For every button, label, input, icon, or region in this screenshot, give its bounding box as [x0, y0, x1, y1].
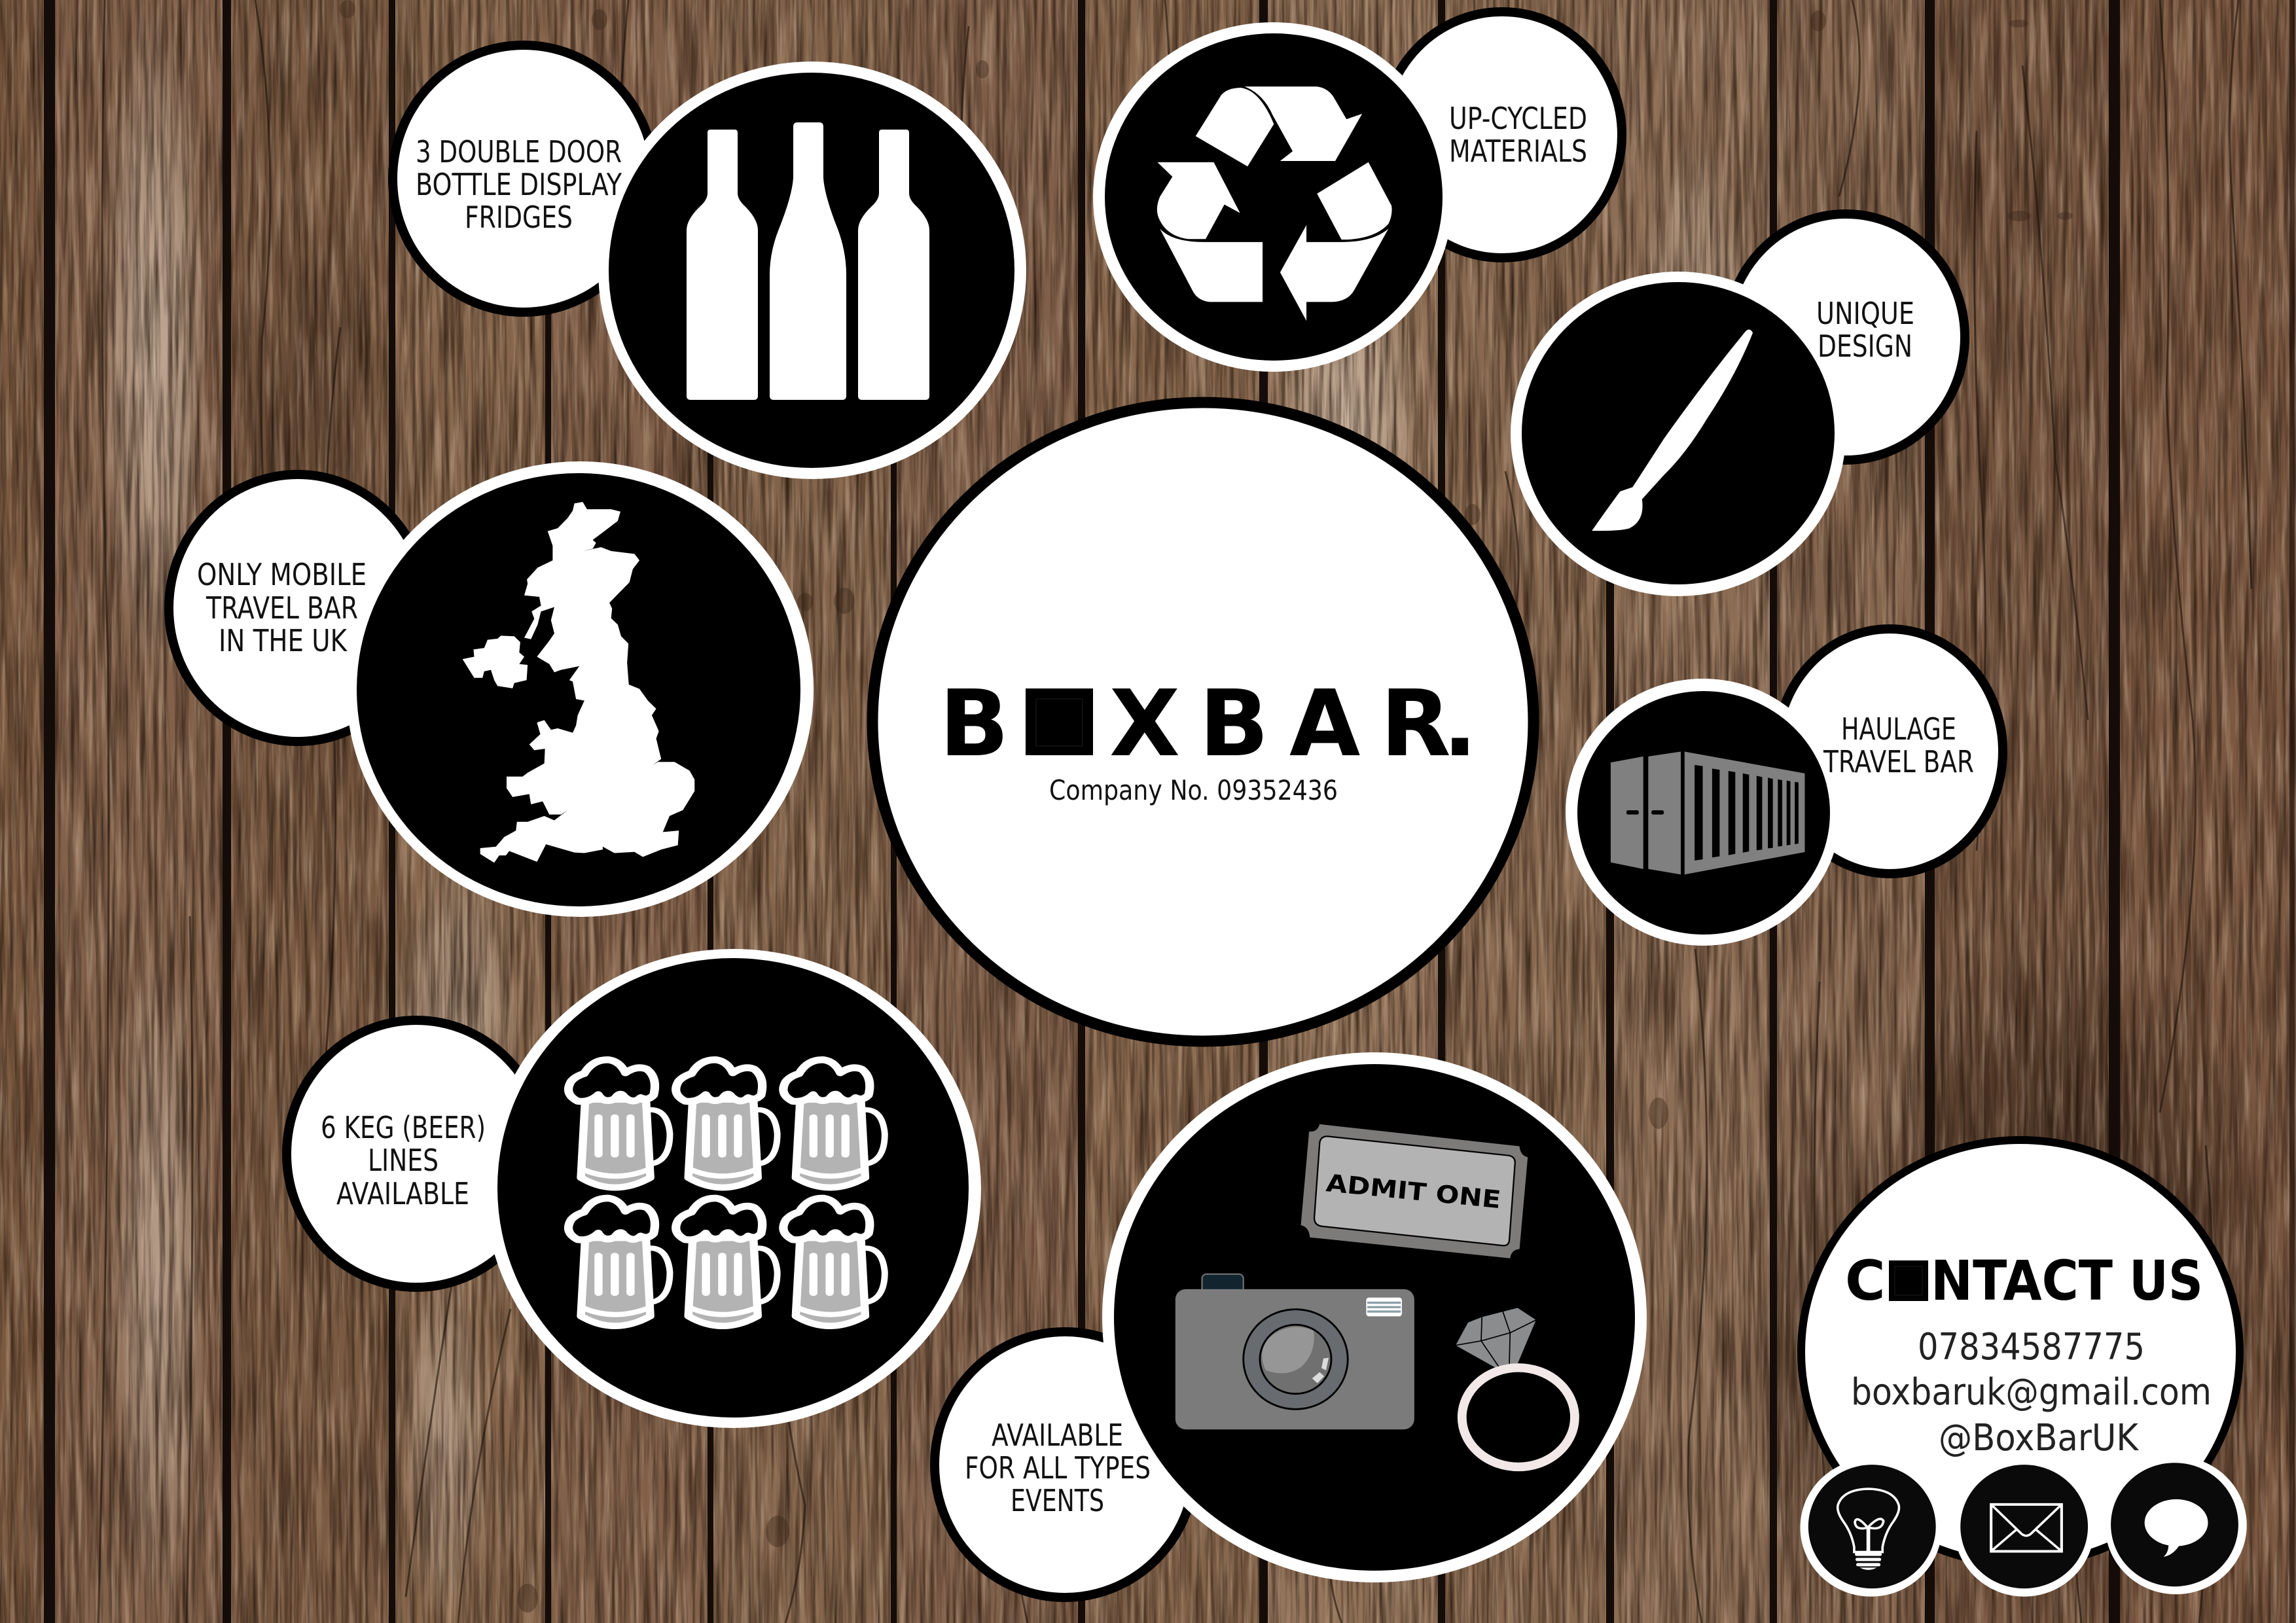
logo: BOXBAR wordmark: B — [1199, 671, 1269, 777]
heading: contact us: US — [2129, 1249, 2203, 1313]
label text: design — [1816, 296, 1914, 364]
panel: contact — [1800, 1140, 2247, 1597]
heading: contact us — [1845, 1249, 2203, 1313]
icon: envelope — [1954, 1459, 2094, 1597]
logo: BOXBAR wordmark — [939, 671, 1477, 777]
panel: events — [935, 1052, 1647, 1597]
label text: events: AVAILABLE — [992, 1418, 1123, 1453]
label text: events: EVENTS — [1011, 1483, 1104, 1518]
label text: haulage: TRAVEL BAR — [1823, 744, 1974, 779]
panel: fridges — [393, 45, 1026, 479]
contact disc — [1801, 1140, 2240, 1564]
icon: light bulb — [1800, 1459, 1942, 1597]
logo: BOXBAR wordmark: . — [1443, 671, 1477, 777]
icon: shipping container — [1611, 751, 1804, 874]
panel: recycled materials — [1093, 12, 1622, 372]
icon disc: design — [1511, 272, 1846, 596]
icon: speech bubble — [2105, 1456, 2247, 1594]
panel: unique design — [1511, 214, 1965, 596]
label bubble: kegs — [287, 1020, 546, 1287]
icon: admit one ticket — [1301, 1124, 1528, 1258]
icon disc: uk — [346, 461, 814, 917]
label text: uk: TRAVEL BAR — [206, 590, 358, 626]
label text: uk — [197, 557, 367, 658]
panel: UK map — [169, 461, 814, 917]
label bubble: materials — [1382, 12, 1622, 258]
icon: three bottles — [687, 122, 929, 400]
company number: Company No. 09352436 — [1049, 774, 1338, 806]
label text: kegs: AVAILABLE — [336, 1176, 469, 1211]
icon disc: kegs — [485, 949, 981, 1428]
panel: central logo — [872, 402, 1534, 1041]
label bubble: design — [1727, 214, 1965, 460]
label text: materials: MATERIALS — [1449, 134, 1587, 169]
label text: events — [965, 1418, 1151, 1518]
icon: camera — [1175, 1274, 1414, 1429]
icon disc: fridges — [598, 62, 1026, 479]
icon disc: materials — [1093, 22, 1453, 372]
heading: contact us: C — [1845, 1249, 1886, 1313]
label text: materials — [1449, 101, 1587, 169]
knots — [340, 0, 2073, 1613]
label bubble: events — [935, 1332, 1195, 1597]
label text: fridges: BOTTLE DISPLAY — [416, 167, 622, 202]
label text: design: DESIGN — [1818, 329, 1912, 364]
label text: design: UNIQUE — [1816, 296, 1914, 331]
label text: fridges: 3 DOUBLE DOOR — [416, 134, 622, 169]
label text: uk: ONLY MOBILE — [197, 557, 367, 592]
contact details: 07834587775 — [1918, 1326, 2145, 1368]
logo disc — [872, 402, 1534, 1041]
label text: haulage — [1823, 711, 1974, 779]
icon disc: events — [1102, 1052, 1647, 1582]
icon: UK map silhouette — [463, 502, 694, 863]
label bubble: haulage — [1776, 629, 2003, 874]
icon: admit one ticket: ADMIT ONE — [1325, 1169, 1502, 1214]
label text: materials: UP-CYCLED — [1449, 101, 1587, 136]
label text: kegs — [321, 1110, 486, 1211]
icon: paintbrush — [1592, 329, 1753, 531]
label text: haulage: HAULAGE — [1841, 711, 1956, 747]
panel: keg lines — [287, 949, 981, 1428]
label text: kegs: 6 KEG (BEER) — [321, 1110, 486, 1145]
panel: haulage — [1566, 629, 2003, 946]
logo: BOXBAR wordmark: B — [939, 671, 1009, 777]
logo: BOXBAR wordmark: A — [1289, 671, 1360, 777]
logo: BOXBAR wordmark: X — [1109, 671, 1180, 777]
label bubble: uk — [169, 474, 427, 741]
logo: BOXBAR wordmark: R — [1380, 671, 1451, 777]
icon: six beer mugs — [569, 1060, 885, 1326]
label text: uk: IN THE UK — [219, 623, 348, 658]
label bubble: fridges — [393, 45, 655, 312]
heading: contact us: NTACT — [1931, 1249, 2113, 1313]
label text: events: FOR ALL TYPES — [965, 1450, 1151, 1486]
contact details — [1851, 1326, 2212, 1459]
contact details: @BoxBarUK — [1939, 1417, 2139, 1459]
contact details: boxbaruk@gmail.com — [1851, 1371, 2212, 1414]
icon: recycling arrows — [1157, 86, 1392, 321]
label text: fridges: FRIDGES — [465, 200, 573, 235]
label text: kegs: LINES — [368, 1143, 439, 1178]
icon: diamond ring — [1456, 1308, 1575, 1467]
icon disc: haulage — [1566, 679, 1840, 946]
label text: fridges — [416, 134, 622, 235]
